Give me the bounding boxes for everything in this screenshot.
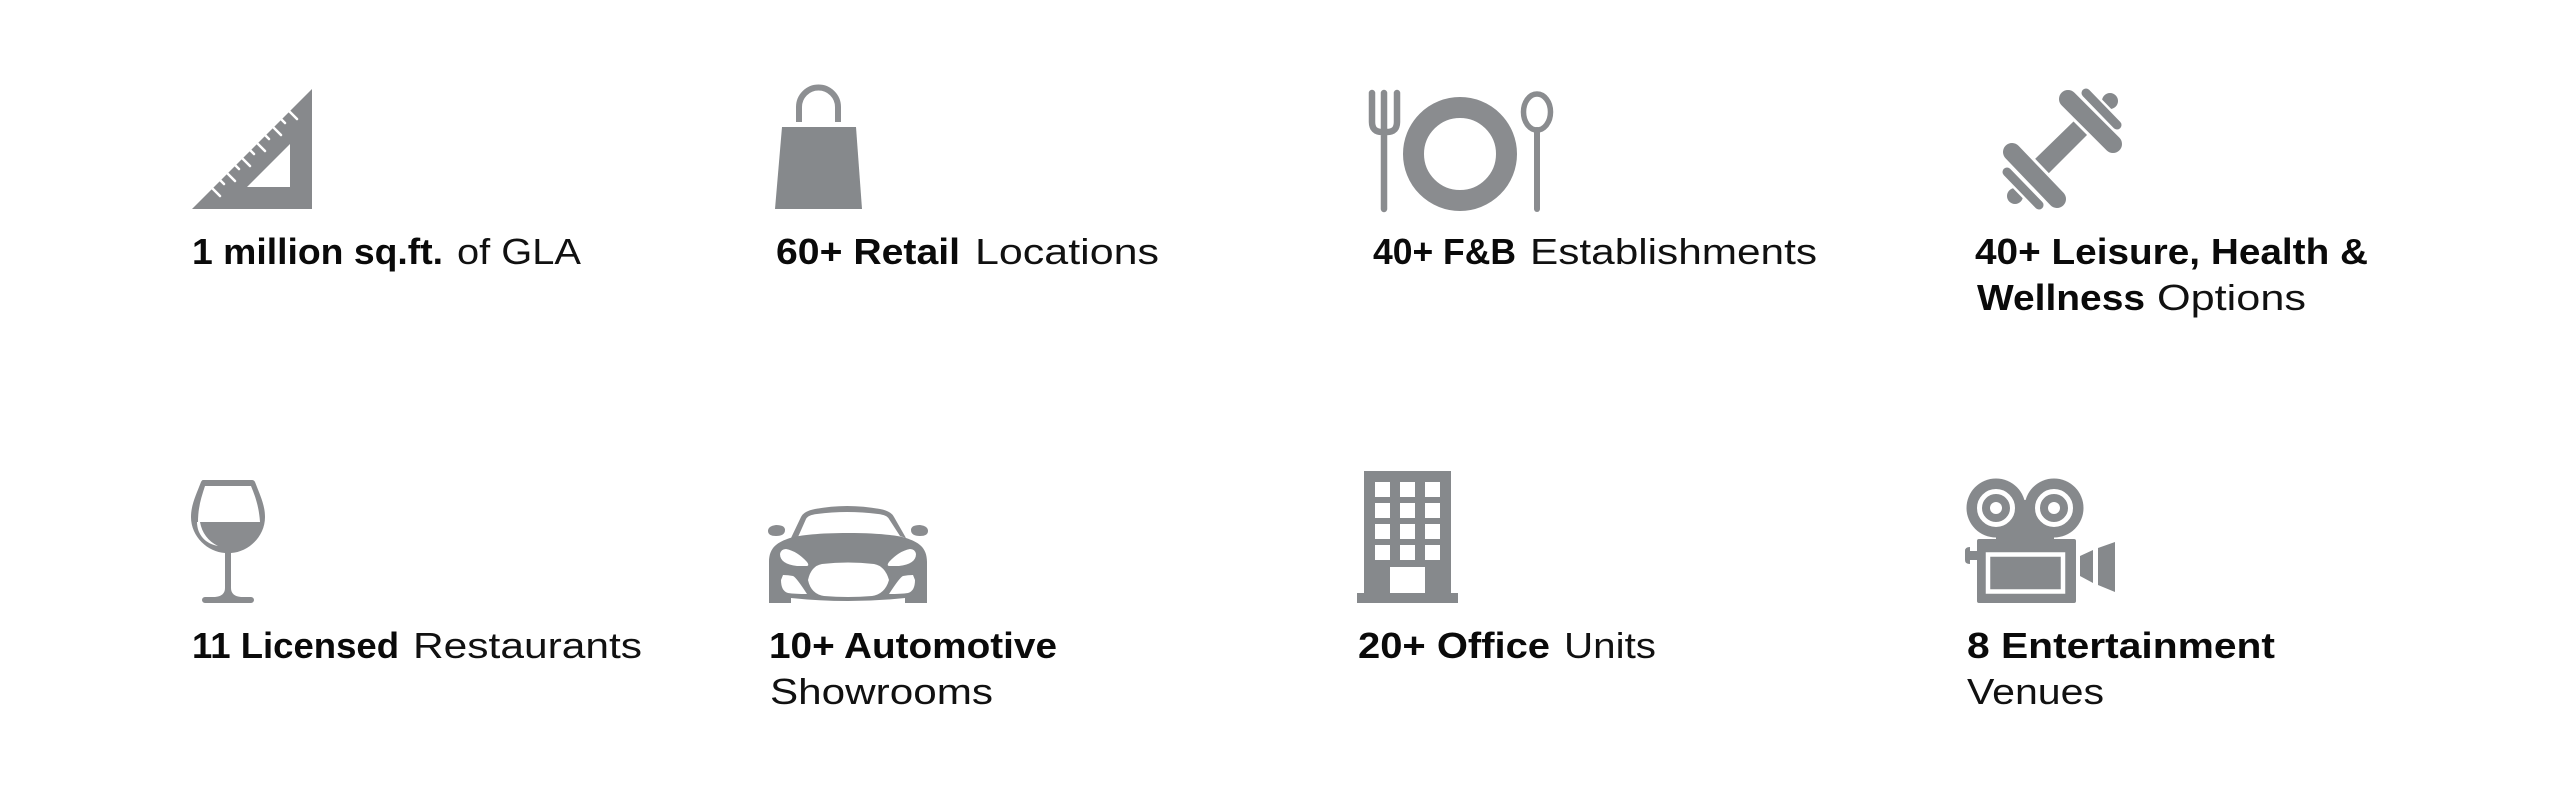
panel: 40+ Leisure, Health & Wellness Options <box>1975 93 2368 318</box>
label <box>776 231 1159 272</box>
panel: 8 Entertainment Venues <box>1965 478 2275 712</box>
label: Locations <box>975 231 1159 272</box>
icon: film camera <box>1965 478 2115 603</box>
panel: 1 million sq.ft. of GLA <box>192 89 581 272</box>
label: 8 Entertainment <box>1967 625 2275 666</box>
label <box>1358 625 1656 666</box>
panel: 20+ Office Units <box>1357 471 1656 666</box>
label: Options <box>2157 277 2306 318</box>
panel: 60+ Retail Locations <box>775 88 1159 272</box>
icon: set square <box>192 89 312 209</box>
label <box>1975 231 2368 318</box>
label <box>192 231 581 272</box>
label <box>1373 231 1817 272</box>
label <box>1967 625 2275 712</box>
label: 40+ Leisure, Health & <box>1975 231 2368 272</box>
label: 40+ F&B <box>1373 231 1516 272</box>
label: of GLA <box>457 231 581 272</box>
label: Establishments <box>1530 231 1817 272</box>
icon: office building <box>1357 471 1458 603</box>
label <box>769 625 1057 712</box>
icon: plate, fork and spoon <box>1372 93 1550 209</box>
panel: 11 Licensed Restaurants <box>191 480 642 666</box>
icon: wine glass <box>191 480 265 603</box>
panel: 10+ Automotive Showrooms <box>768 506 1057 712</box>
label <box>192 625 642 666</box>
label: Venues <box>1967 671 2104 712</box>
icon: car <box>768 506 928 603</box>
label: Restaurants <box>413 625 642 666</box>
label: Showrooms <box>770 671 993 712</box>
label: 1 million sq.ft. <box>192 231 443 272</box>
label: Units <box>1564 625 1656 666</box>
icon: shopping bag <box>775 88 862 209</box>
panel: 40+ F&B Establishments <box>1372 93 1817 272</box>
label: 11 Licensed <box>192 625 399 666</box>
icon: dumbbell <box>2007 93 2118 205</box>
label: 60+ Retail <box>776 231 960 272</box>
label: 10+ Automotive <box>769 625 1057 666</box>
label: Wellness <box>1977 277 2145 318</box>
label: 20+ Office <box>1358 625 1550 666</box>
